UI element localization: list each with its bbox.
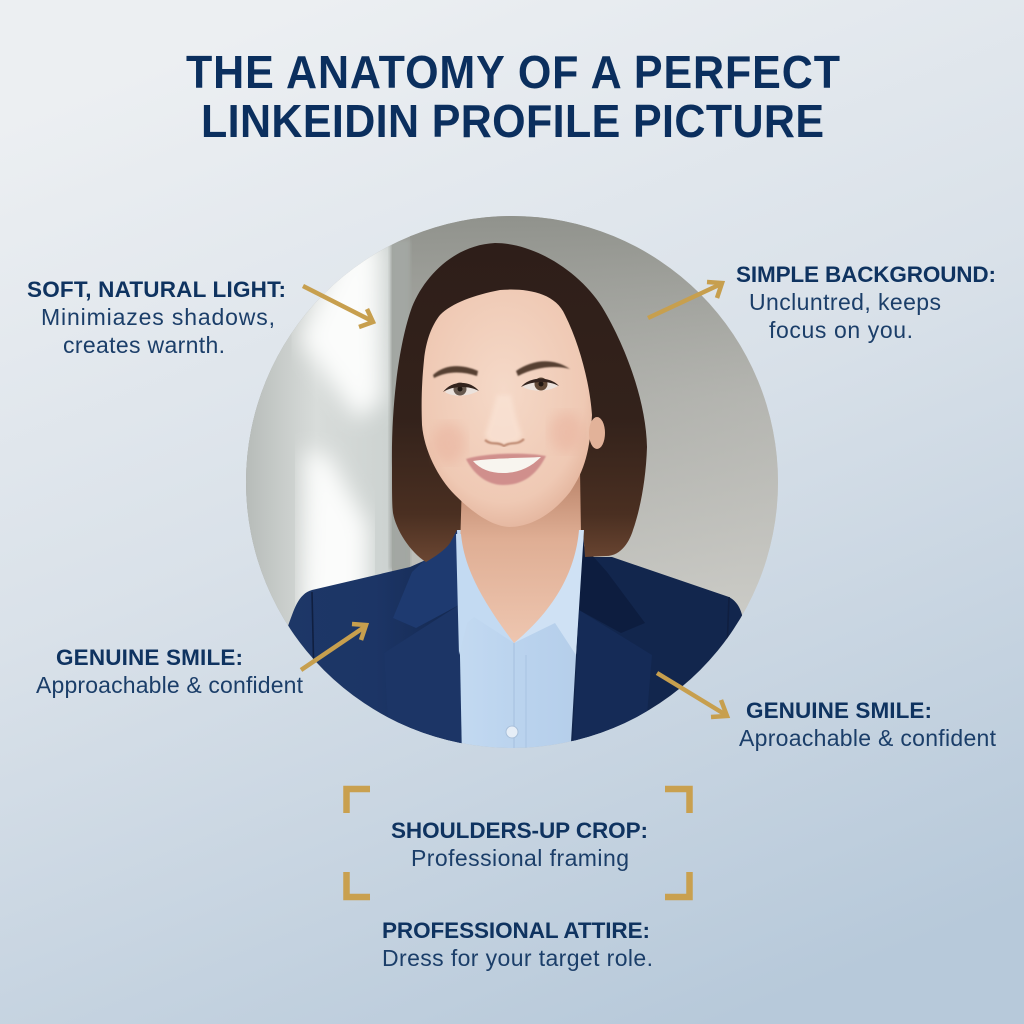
label: genuine smile left: GENUINE SMILE: bbox=[56, 645, 243, 670]
placket and button bbox=[506, 643, 526, 760]
neck bbox=[460, 470, 581, 643]
arrow: soft natural light bbox=[303, 286, 373, 327]
label: shoulders-up crop: Professional framing bbox=[411, 845, 629, 871]
shirt bbox=[457, 530, 584, 748]
portrait photo bbox=[240, 210, 785, 760]
eyes bbox=[443, 378, 559, 396]
label: professional attire bbox=[382, 918, 653, 971]
label: professional attire: PROFESSIONAL ATTIRE: bbox=[382, 918, 650, 943]
label: simple background: SIMPLE BACKGROUND: bbox=[736, 262, 996, 287]
label: genuine smile right bbox=[739, 698, 997, 751]
label: soft natural light: Minimiazes shadows, bbox=[41, 304, 275, 330]
label: soft natural light bbox=[27, 277, 286, 358]
mouth bbox=[466, 454, 546, 485]
title: LINKEIDIN PROFILE PICTURE bbox=[201, 97, 824, 147]
collar bbox=[456, 530, 584, 655]
nose bbox=[485, 395, 524, 446]
label: professional attire: Dress for your target role. bbox=[382, 945, 653, 971]
label: simple background: focus on you. bbox=[769, 317, 913, 343]
label: genuine smile left bbox=[36, 645, 304, 698]
label: shoulders-up crop: SHOULDERS-UP CROP: bbox=[391, 818, 648, 843]
face bbox=[422, 290, 592, 527]
cheek blush bbox=[434, 414, 580, 460]
title: THE ANATOMY OF A PERFECT bbox=[186, 48, 840, 98]
label: shoulders-up crop bbox=[391, 818, 648, 871]
label: genuine smile left: Approachable & confident bbox=[36, 672, 304, 698]
label: simple background: Uncluntred, keeps bbox=[749, 289, 941, 315]
arrow: simple background bbox=[648, 282, 722, 318]
ear bbox=[589, 417, 605, 449]
label: soft natural light: creates warnth. bbox=[63, 332, 225, 358]
label: genuine smile right: Aproachable & confident bbox=[739, 725, 997, 751]
title bbox=[186, 48, 840, 147]
crop brackets bbox=[346, 789, 690, 897]
label: simple background bbox=[736, 262, 996, 343]
arrow: genuine smile right bbox=[657, 673, 727, 717]
eyebrows bbox=[433, 361, 570, 378]
label: genuine smile right: GENUINE SMILE: bbox=[746, 698, 932, 723]
photo backdrop bbox=[240, 210, 785, 755]
hair bbox=[392, 243, 647, 562]
arrow: genuine smile left bbox=[301, 624, 366, 670]
label: soft natural light: SOFT, NATURAL LIGHT: bbox=[27, 277, 286, 302]
jacket bbox=[288, 530, 744, 760]
